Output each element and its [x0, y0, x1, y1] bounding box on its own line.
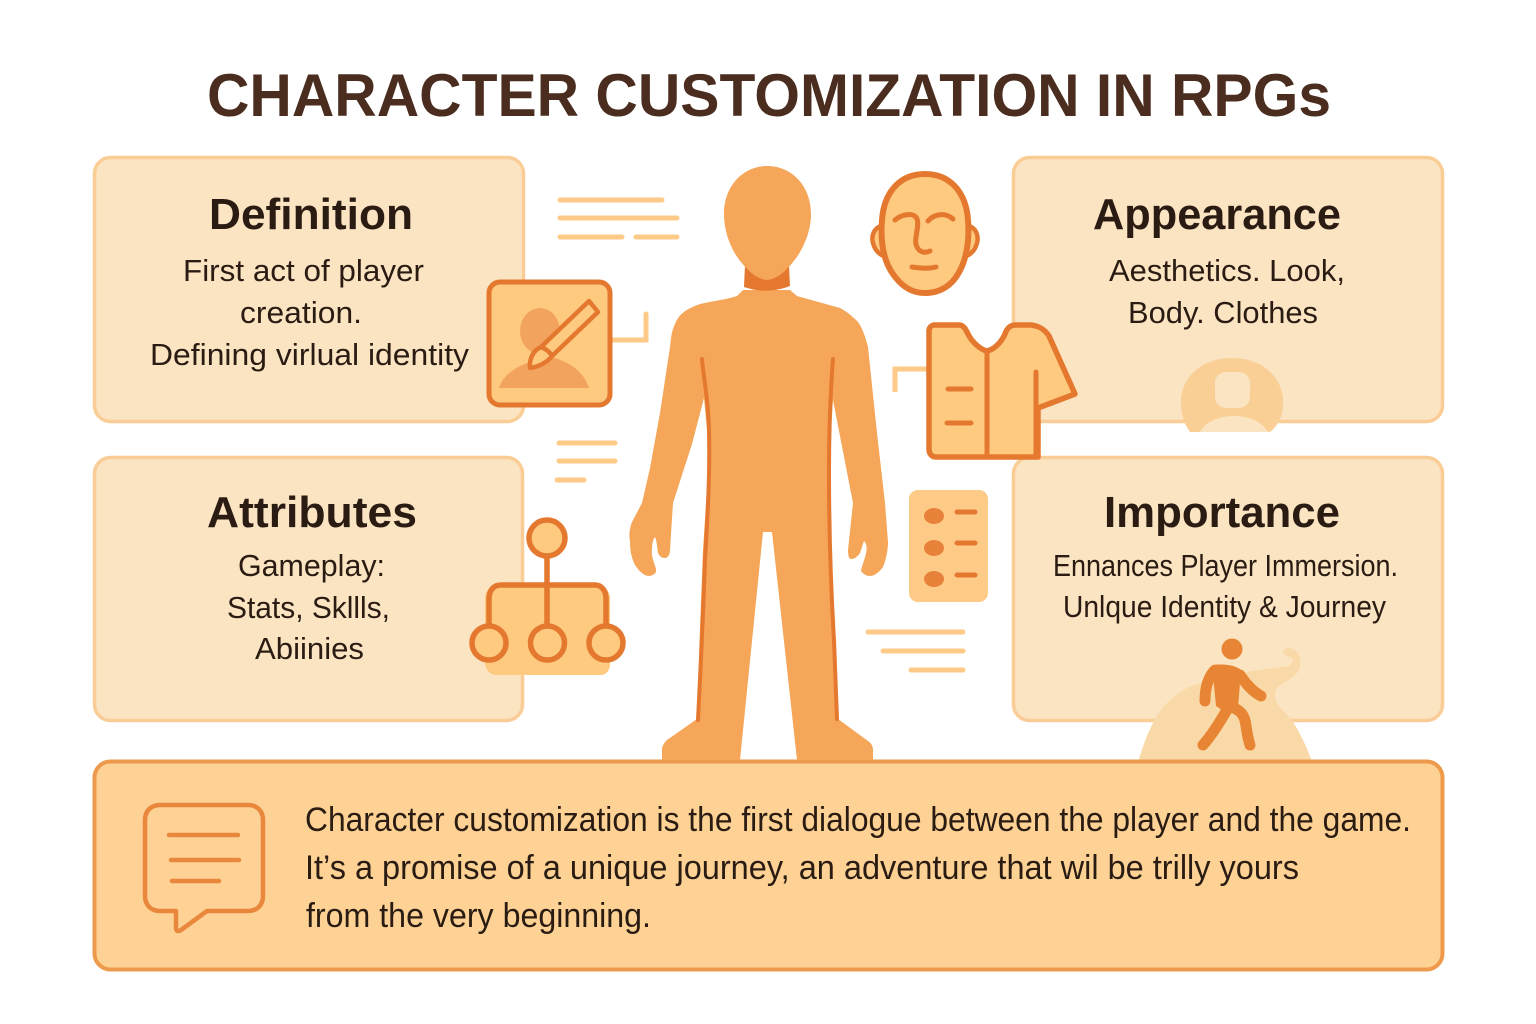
panel: appearance: [1014, 158, 1442, 432]
text: appearance body: Body. Clothes: [1128, 295, 1318, 330]
text: attributes body: Gameplay:: [238, 548, 385, 583]
head: [724, 166, 811, 280]
tree connectors: [489, 556, 606, 625]
icon: checklist: [909, 490, 988, 602]
text: definition body: Defining virlual identity: [150, 337, 470, 372]
heading: appearance: Appearance: [1093, 190, 1341, 239]
icon: walking figure on hill: [1138, 638, 1312, 762]
connector: pencil icon to figure: [613, 314, 646, 340]
text: definition body: [150, 253, 470, 372]
text: attributes body: [227, 548, 390, 666]
title: CHARACTER CUSTOMIZATION IN RPGs: [207, 62, 1331, 129]
text: closing statement: Character customization is the first dialogue between the player and the game.: [305, 801, 1411, 839]
icon: face: [872, 174, 978, 293]
text: attributes body: Stats, Skllls,: [227, 590, 390, 625]
bottom panel: quote: [94, 762, 1442, 970]
panel: attributes: [94, 458, 522, 720]
decorative lines: importance note: [868, 632, 963, 670]
heading: importance: Importance: [1104, 488, 1340, 537]
text: appearance body: [1109, 253, 1345, 330]
text: importance body: Ennances Player Immersion.: [1053, 548, 1398, 583]
decorative lines: definition note: [560, 200, 677, 237]
body shading lines: [698, 359, 837, 720]
neck band: [744, 265, 790, 291]
text: closing statement: from the very beginning.: [306, 897, 651, 935]
text: definition body: creation.: [240, 295, 362, 330]
text: definition body: First act of player: [183, 253, 424, 288]
icon: speech bubble: [145, 805, 263, 931]
icon: shirt: [929, 325, 1075, 457]
text: attributes body: Abiinies: [255, 631, 364, 666]
connector: shirt to figure: [895, 369, 927, 392]
body: [629, 290, 888, 760]
icon: skill tree: [472, 520, 623, 675]
heading: attributes: Attributes: [207, 488, 417, 537]
heading: definition: Definition: [209, 190, 413, 239]
text: importance body: [1053, 548, 1398, 624]
decorative lines: attributes note: [557, 443, 615, 480]
icon: avatar silhouette: [1181, 358, 1283, 432]
panel: importance: [1014, 458, 1442, 720]
text: appearance body: Aesthetics. Look,: [1109, 253, 1345, 288]
text: closing statement: [305, 801, 1411, 935]
central character figure: [629, 166, 888, 760]
panel: definition: [94, 158, 524, 422]
text: importance body: Unlque Identity & Journey: [1063, 589, 1386, 624]
icon: pencil and avatar: [489, 282, 610, 405]
text: closing statement: It’s a promise of a unique journey, an adventure that wil be trilly yours: [305, 849, 1299, 887]
